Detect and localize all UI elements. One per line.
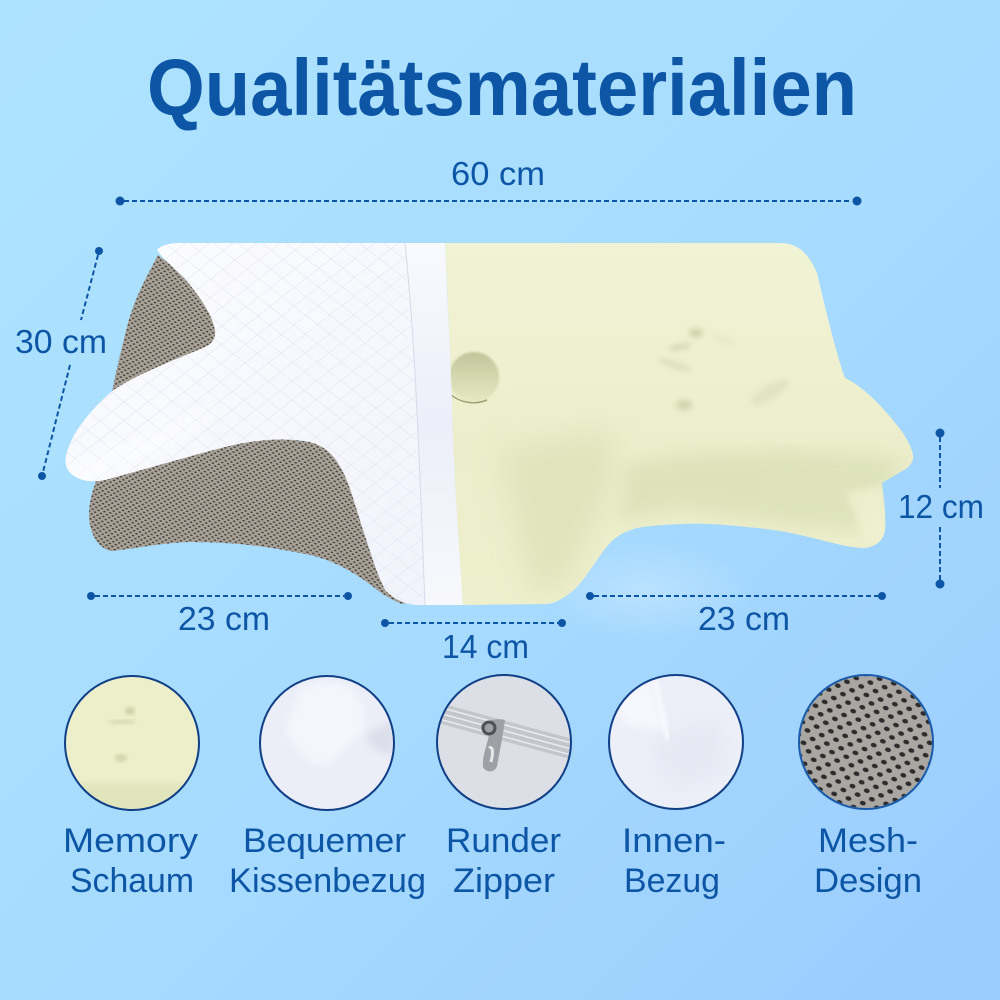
material: memory foam: Schaum: [70, 862, 194, 900]
material: mesh design: [795, 672, 940, 900]
foam shading: [500, 329, 905, 590]
material: round zipper: Zipper: [453, 862, 555, 900]
quilted white cover: [60, 240, 470, 610]
dimension: width 60 cm: 60 cm: [451, 155, 545, 192]
material: comfortable cover: Bequemer: [243, 822, 406, 860]
dimension: centre 14 cm: [381, 619, 566, 665]
material: round zipper: Runder: [446, 822, 561, 860]
title: Qualitätsmaterialien: [147, 43, 857, 132]
hand print: [657, 329, 793, 410]
icon: mesh swatch: [800, 676, 932, 808]
material: memory foam: Memory: [63, 822, 198, 860]
material: memory foam: [64, 675, 200, 892]
icon: zipper swatch: [438, 676, 570, 808]
dimension: left wing 23 cm: 23 cm: [178, 600, 270, 637]
dimension: height 12 cm: 12 cm: [898, 488, 984, 525]
dimension: depth 30 cm: [15, 247, 107, 480]
material: comfortable cover: [229, 670, 426, 900]
material: mesh design: Design: [814, 862, 922, 900]
dimension: centre 14 cm: 14 cm: [442, 628, 529, 665]
dimension: height 12 cm: [898, 428, 984, 588]
material: comfortable cover: Kissenbezug: [229, 862, 426, 900]
mesh side panel upper: [112, 255, 218, 392]
dimension: right wing 23 cm: 23 cm: [698, 600, 790, 637]
material: mesh design: Mesh-: [818, 822, 918, 860]
icon: memory foam swatch: [66, 677, 198, 809]
material: inner cover: Innen-: [622, 822, 726, 860]
dimension: depth 30 cm: 30 cm: [15, 323, 107, 360]
material: inner cover: Bezug: [624, 862, 720, 900]
foam finger hole: [449, 352, 499, 403]
mesh side panel lower: [89, 432, 420, 604]
icon: cover fabric swatch: [261, 677, 393, 809]
dimension: width 60 cm: [116, 155, 862, 206]
dimension: right wing 23 cm: [586, 592, 886, 637]
icon: inner cover swatch: [610, 676, 742, 808]
material: round zipper: [435, 672, 575, 900]
material: inner cover: [605, 672, 750, 900]
dimension: left wing 23 cm: [87, 592, 352, 637]
foam body: [445, 243, 913, 605]
pillow: [60, 240, 913, 610]
zip band: [405, 243, 463, 605]
